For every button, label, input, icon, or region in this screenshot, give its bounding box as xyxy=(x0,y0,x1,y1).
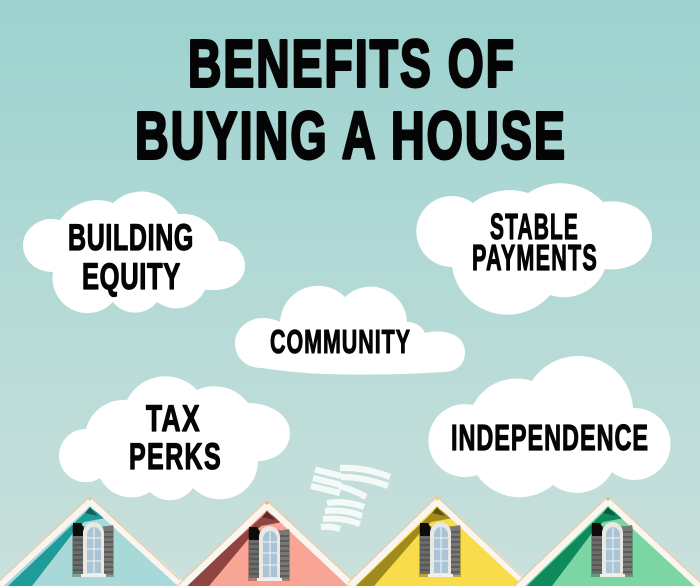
panel: community cloud: COMMUNITY xyxy=(270,323,411,360)
icon: window xyxy=(72,522,114,577)
icon: window xyxy=(248,526,290,581)
house: coral xyxy=(172,500,360,586)
panel: building equity cloud: EQUITY xyxy=(82,256,181,297)
panel: tax perks cloud: TAX xyxy=(146,398,201,439)
panel: building equity cloud xyxy=(23,192,245,313)
icon: logo xyxy=(311,468,390,529)
title xyxy=(135,26,567,174)
icon: window xyxy=(419,522,461,577)
house: teal xyxy=(0,496,190,586)
panel: community cloud xyxy=(235,286,465,375)
panel: stable payments cloud xyxy=(416,183,652,315)
icon: window xyxy=(591,522,633,577)
panel: independence cloud xyxy=(428,356,671,497)
panel: stable payments cloud: PAYMENTS xyxy=(472,237,598,278)
house: green xyxy=(510,496,700,586)
panel: stable payments cloud: STABLE xyxy=(490,206,579,247)
panel: tax perks cloud xyxy=(59,376,290,500)
panel: building equity cloud: BUILDING xyxy=(68,217,194,258)
panel: houses xyxy=(0,496,700,586)
title: BENEFITS OF xyxy=(188,26,516,102)
panel: tax perks cloud: PERKS xyxy=(129,436,222,477)
house: yellow xyxy=(342,496,530,586)
